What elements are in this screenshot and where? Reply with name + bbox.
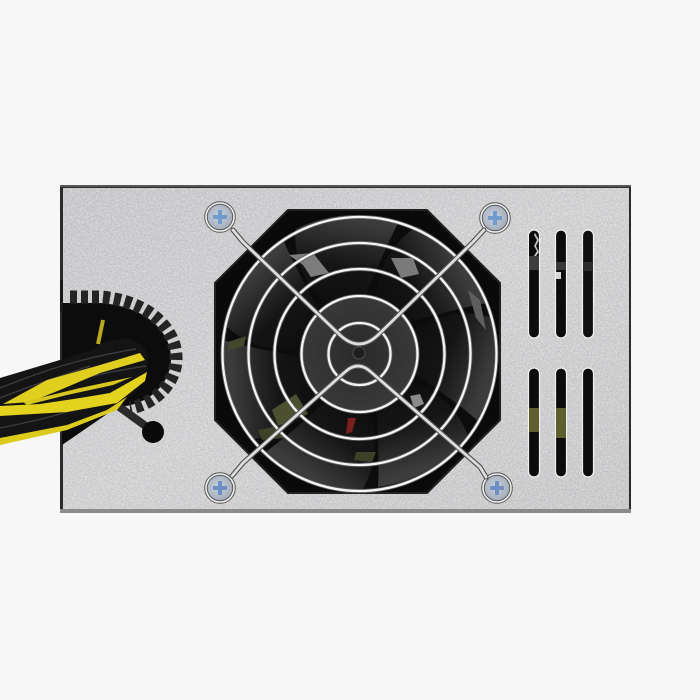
yellow wire 1 — [3, 353, 145, 404]
fan housing — [215, 210, 500, 493]
bottom vent slot 1 — [528, 368, 540, 477]
bottom vent slot 2 — [556, 368, 566, 477]
top vent slot 3 — [582, 230, 594, 338]
top vent slot 1 — [528, 230, 540, 338]
black sheath mass — [0, 339, 148, 445]
yellow wire 4 — [0, 397, 127, 445]
screw bottom right — [483, 474, 511, 502]
yellow wire 3 — [0, 372, 147, 416]
fan hub — [301, 295, 417, 411]
screws — [206, 203, 511, 502]
interior seen through slots — [529, 233, 593, 438]
finger guard rings — [222, 217, 496, 491]
top vent slot 2 — [556, 230, 566, 338]
cable tie — [118, 406, 147, 427]
product photo: power supply rear — [0, 185, 631, 513]
screw top right — [481, 204, 509, 232]
bottom vent slot 3 — [582, 368, 594, 477]
tie hole — [142, 421, 164, 443]
metal chassis panel — [60, 185, 631, 513]
screw top left — [206, 203, 234, 231]
fan — [206, 203, 500, 502]
fan blades — [224, 215, 494, 489]
guard cross wires — [232, 230, 486, 477]
cable bundle — [0, 339, 148, 445]
cable grommet — [60, 280, 176, 445]
inner wire — [98, 320, 103, 344]
grommet opening — [62, 303, 171, 445]
vent slots — [528, 230, 594, 477]
screw bottom left — [206, 474, 234, 502]
grommet teeth — [70, 297, 176, 408]
yellow wire 2 — [23, 377, 132, 405]
black wire highlights — [0, 349, 146, 428]
left chassis edge — [60, 280, 63, 312]
hub centre — [353, 347, 365, 359]
